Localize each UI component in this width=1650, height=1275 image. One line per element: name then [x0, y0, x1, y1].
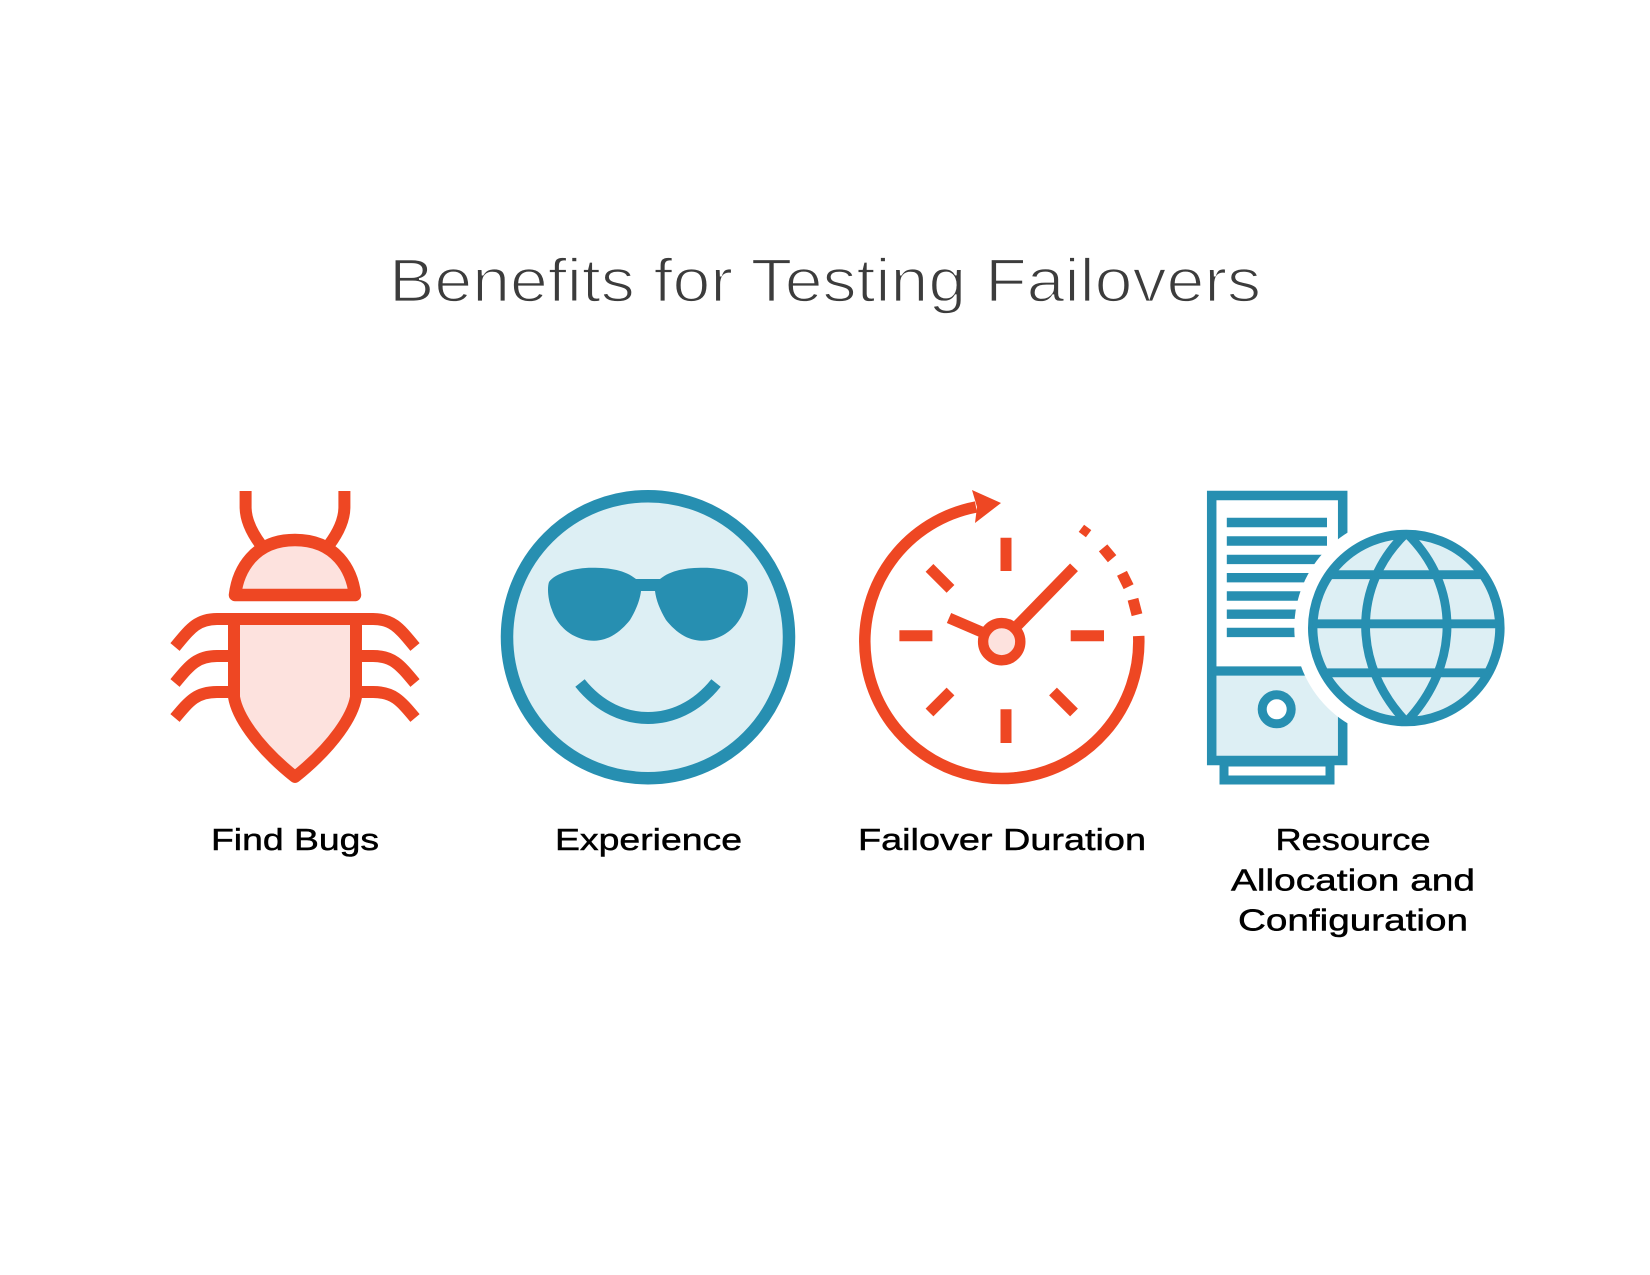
label: resource allocation and configuration: Allocation and — [1231, 862, 1475, 898]
panel: experience — [507, 496, 789, 857]
title: Benefits for Testing Failovers — [389, 247, 1261, 315]
globe grid — [1317, 539, 1496, 717]
circular arrow arc — [865, 507, 1139, 779]
globe — [1300, 533, 1510, 722]
small dash — [1081, 528, 1089, 534]
sunglasses — [548, 568, 748, 641]
smile — [580, 683, 716, 718]
label: failover duration: Failover Duration — [858, 822, 1146, 857]
label: find bugs: Find Bugs — [211, 822, 379, 857]
label: resource allocation and configuration: Resource — [1276, 822, 1430, 857]
label: resource allocation and configuration: Configuration — [1238, 902, 1468, 938]
clock hub — [983, 623, 1020, 660]
bug body — [234, 619, 356, 777]
icon: bug — [175, 491, 415, 777]
face — [507, 496, 789, 778]
arrow head — [972, 490, 1001, 523]
bug legs — [175, 619, 415, 718]
panel: find bugs — [175, 491, 415, 857]
bug antennae — [246, 491, 344, 545]
label: resource allocation and configuration — [1231, 822, 1475, 938]
bug head — [235, 540, 355, 595]
server divider — [1212, 666, 1343, 676]
icon: server with globe — [1212, 496, 1518, 780]
icon: clock with circular arrow — [865, 490, 1139, 779]
icon: smiley with sunglasses — [507, 496, 789, 778]
dashed arc segment — [1103, 548, 1137, 615]
server button — [1262, 695, 1291, 724]
server tower — [1212, 496, 1343, 760]
label: experience: Experience — [555, 822, 742, 857]
server lower fill — [1212, 671, 1343, 760]
clock hands — [949, 567, 1074, 633]
hour ticks — [899, 538, 1104, 743]
panel: failover duration — [858, 490, 1146, 857]
server feet — [1224, 762, 1330, 780]
globe disc — [1313, 534, 1500, 722]
server lines — [1227, 522, 1327, 632]
globe halo — [1294, 516, 1518, 740]
panel: resource allocation and configuration — [1212, 496, 1518, 938]
